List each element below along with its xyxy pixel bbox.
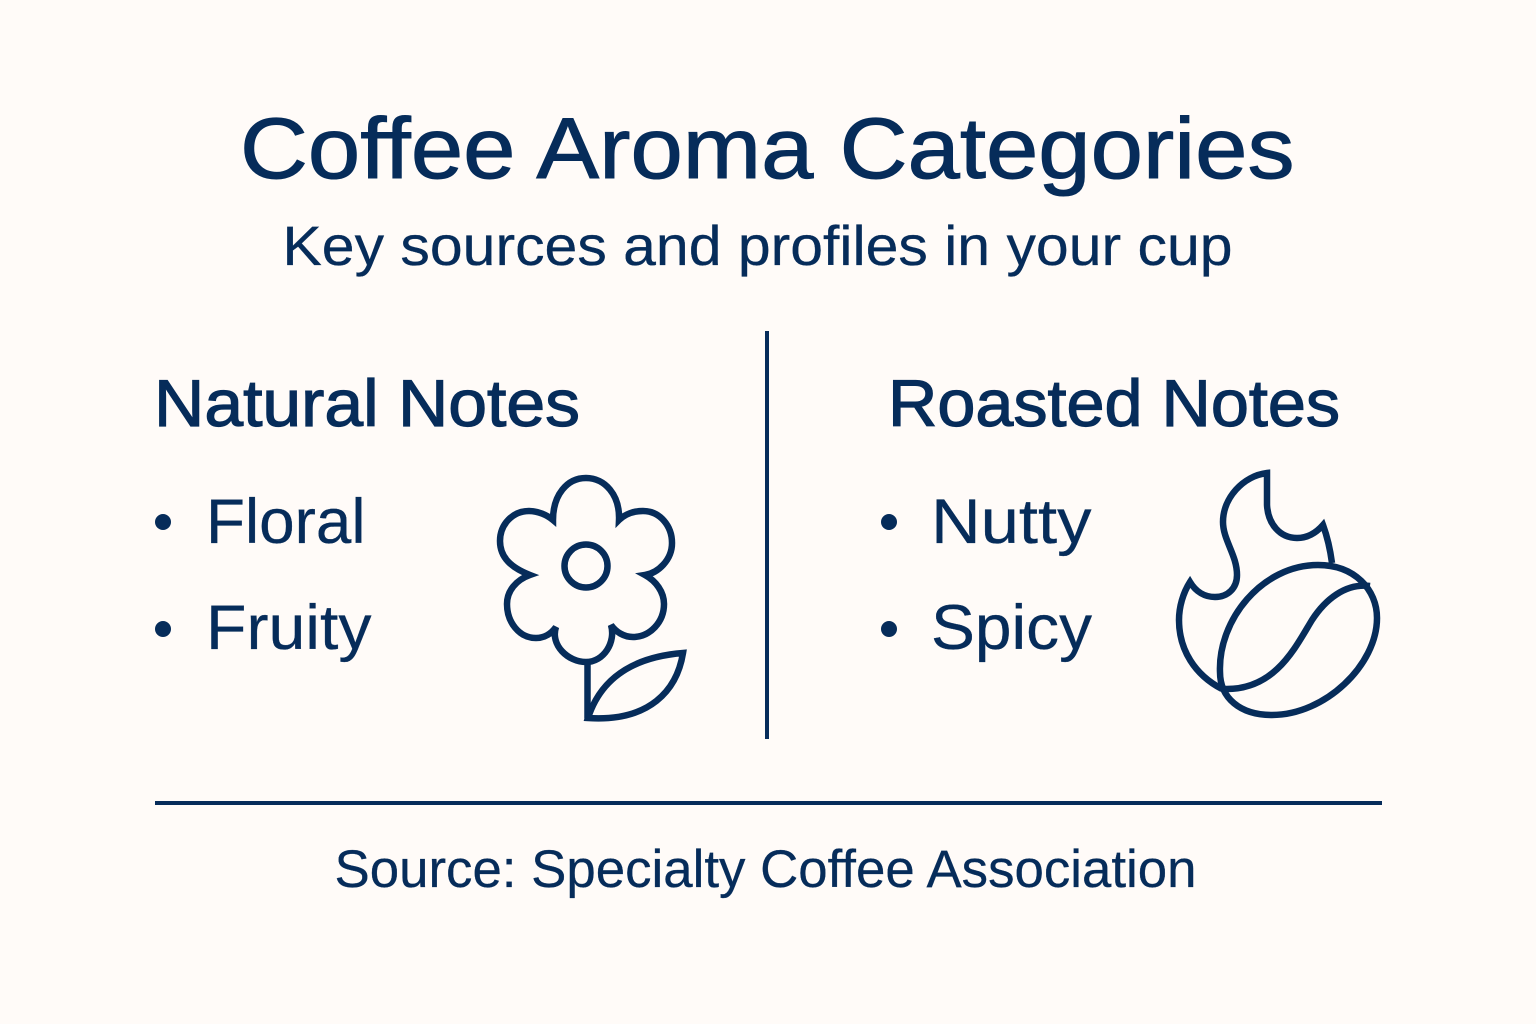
- icon: flower: [500, 478, 683, 718]
- heading: roasted notes: Roasted Notes: [888, 366, 1340, 440]
- panel: roasted notes: [881, 366, 1377, 715]
- list item: nutty: [881, 487, 1092, 557]
- heading: natural notes: Natural Notes: [154, 366, 580, 440]
- list item: fruity: Fruity: [206, 593, 372, 663]
- list item: spicy: Spicy: [931, 593, 1093, 663]
- list item: floral: Floral: [206, 487, 366, 557]
- subtitle: Key sources and profiles in your cup: [282, 214, 1232, 277]
- list item: nutty: Nutty: [931, 487, 1092, 557]
- vertical divider: [765, 331, 769, 739]
- source line: Source: Specialty Coffee Association: [334, 840, 1196, 899]
- horizontal divider: [155, 801, 1382, 805]
- icon: flame and coffee bean: [1179, 473, 1377, 715]
- title: Coffee Aroma Categories: [240, 101, 1294, 197]
- panel: natural notes: [154, 366, 683, 718]
